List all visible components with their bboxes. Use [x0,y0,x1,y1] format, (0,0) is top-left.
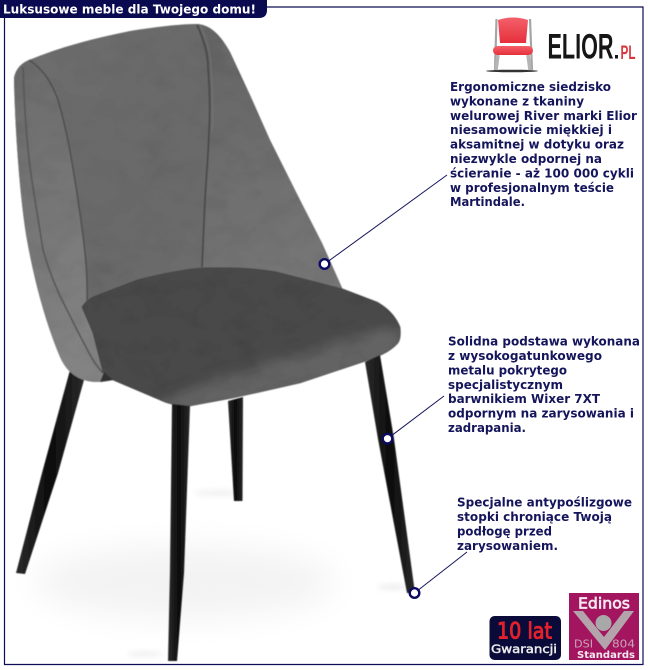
back leg [228,397,243,501]
callout: seat fabric: ścieranie - aż 100 000 cykli [450,165,634,180]
callout: anti-slip feet: Specjalne antypoślizgowe [457,495,632,510]
callout: metal base: barwnikiem Wixer 7XT [448,391,600,406]
callout: metal base: metalu pokrytego [448,362,567,377]
callout: metal base: zadrapania. [448,420,526,435]
badge: Edinos standards: 804 [612,638,635,650]
logo: PL [620,43,636,64]
callout: metal base: specjalistycznym [448,377,563,392]
callout: seat fabric: welurowej River marki Elior [450,108,638,123]
front left leg [16,370,84,574]
badge: Edinos standards: Standards [577,650,635,661]
callout: metal base: odpornym na zarysowania i [448,406,634,421]
callout: metal base: Solidna podstawa wykonana [448,334,640,349]
badge: 10 years warranty: Gwarancji [491,642,557,656]
right side panel [197,24,343,290]
callout: metal base [383,334,640,444]
header tab: Luksusowe meble dla Twojego domu! [3,2,256,16]
icon: red chair [486,18,538,72]
back velvet texture [0,20,350,390]
badge: Edinos standards: Edinos [578,594,630,612]
callout: anti-slip feet: stopki chroniące Twoją [457,509,612,524]
badge: Edinos standards: DSI [574,638,593,650]
callout: seat fabric: niezwykle odpornej na [450,151,602,166]
callout: metal base: z wysokogatunkowego [448,348,602,363]
callout: anti-slip feet [410,495,632,598]
badge: 10 years warranty [490,616,561,660]
chair back [14,24,343,382]
logo [486,18,636,72]
right front leg [365,355,415,593]
callout: seat fabric: Martindale. [450,194,525,209]
callout: anti-slip feet: zarysowaniem. [457,538,558,553]
center front leg [168,404,190,661]
floor shadow [35,490,409,656]
left side panel [14,60,113,382]
callout: seat fabric: w profesjonalnym teście [450,180,614,195]
callout: seat fabric [320,79,638,269]
callout: seat fabric: Ergonomiczne siedzisko [450,79,611,94]
callout: seat fabric: wykonane z tkaniny [450,93,584,108]
chair [0,20,415,661]
seat [80,265,410,415]
badge: Edinos standards [569,593,639,661]
callout: anti-slip feet: podłogę przed [457,523,552,538]
badge: 10 years warranty: 10 lat [497,618,552,644]
seams [23,25,213,373]
dark shadow under back [100,372,113,382]
callout: seat fabric: aksamitnej w dotyku oraz [450,137,624,152]
callout: seat fabric: niesamowicie miękkiej i [450,122,612,137]
